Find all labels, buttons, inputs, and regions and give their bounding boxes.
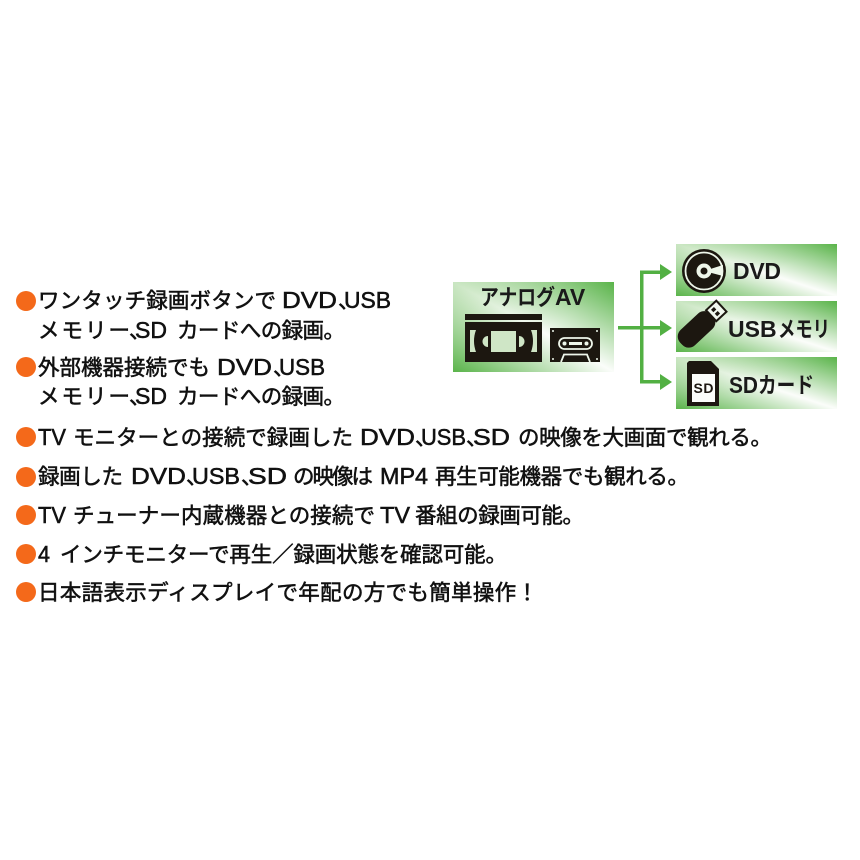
bullet: TV monitor playback xyxy=(16,424,772,450)
bullet: MP4 playback: 録画した xyxy=(38,465,123,489)
bullet: one-touch recording: メモリー xyxy=(38,319,130,343)
bullet: TV monitor playback: の映像を大画面で観れる。 xyxy=(518,426,772,450)
bullet: TV monitor playback: USB xyxy=(421,424,466,450)
bullet: TV tuner recording: 番組の録画可能。 xyxy=(415,504,584,528)
bullet: TV tuner recording: TV xyxy=(38,502,66,528)
bullet: external device recording: 、 xyxy=(273,356,295,380)
bullet: MP4 playback: DVD xyxy=(131,463,186,489)
icon: cassette tape xyxy=(550,328,600,362)
panel: SD card xyxy=(676,357,837,409)
bullet: TV monitor playback: TV xyxy=(38,424,66,450)
bullet: TV monitor playback: DVD xyxy=(360,424,415,450)
bullet: Japanese display: 日本語表示ディスプレイで年配の方でも簡単操作！ xyxy=(38,581,538,605)
bullet: 4-inch monitor: 4 xyxy=(38,541,50,567)
bullet: one-touch recording: DVD xyxy=(282,287,337,313)
bullet: MP4 playback: 、 xyxy=(241,465,263,489)
bullet: TV monitor playback: SD xyxy=(473,424,510,450)
bullet: external device recording: SD xyxy=(135,383,167,409)
bullet: one-touch recording: SD xyxy=(135,317,167,343)
label: SD card: SD xyxy=(729,372,758,398)
bullet: one-touch recording xyxy=(16,287,391,343)
bullet: TV monitor playback: 、 xyxy=(415,426,437,450)
bullet: MP4 playback: 、 xyxy=(186,465,208,489)
bullet: TV tuner recording: チューナー内蔵機器との接続で xyxy=(73,504,375,528)
bullet: external device recording: メモリー xyxy=(38,385,130,409)
icon: SD card: SD xyxy=(694,380,714,396)
bullet: MP4 playback: の映像は xyxy=(293,465,373,489)
bullet: external device recording: USB xyxy=(279,354,325,380)
bullet: TV tuner recording xyxy=(16,502,584,528)
icon: VHS tape xyxy=(465,314,542,362)
bullet: 4-inch monitor: インチモニターで再生／録画状態を確認可能。 xyxy=(60,543,507,567)
panel: analog AV source xyxy=(453,282,614,372)
bullet: external device recording xyxy=(16,354,345,409)
bullet: one-touch recording: 、 xyxy=(338,289,360,313)
icon: USB stick xyxy=(674,298,729,351)
bullet: external device recording: カードへの録画。 xyxy=(177,385,345,409)
label: USB memory: USB xyxy=(728,316,777,342)
bullet: external device recording: 、 xyxy=(129,385,151,409)
bullet: MP4 playback xyxy=(16,463,689,489)
bullet: one-touch recording: 、 xyxy=(129,319,151,343)
bullet: MP4 playback: MP4 xyxy=(380,463,428,489)
bullet: one-touch recording: USB xyxy=(344,287,391,313)
panel: DVD xyxy=(676,244,837,296)
heading: analog AV: AV xyxy=(555,284,586,310)
bullet: one-touch recording: カードへの録画。 xyxy=(177,319,345,343)
icon: disc xyxy=(682,249,726,293)
bullet: MP4 playback: USB xyxy=(192,463,240,489)
panel: USB memory xyxy=(674,298,837,352)
bullet: TV tuner recording: TV xyxy=(380,502,410,528)
bullet: external device recording: DVD xyxy=(217,354,272,380)
label: DVD: DVD xyxy=(733,258,781,284)
bullet: TV monitor playback: 、 xyxy=(466,426,488,450)
bullet: MP4 playback: 再生可能機器でも観れる。 xyxy=(435,465,689,489)
heading: analog AV: アナログ xyxy=(480,285,555,310)
bullet: external device recording: 外部機器接続でも xyxy=(38,356,210,380)
bullet: MP4 playback: SD xyxy=(248,463,287,489)
bullet: one-touch recording: ワンタッチ録画ボタンで xyxy=(38,289,276,313)
arrow: branching to outputs xyxy=(618,264,672,390)
label: USB memory: メモリ xyxy=(778,317,830,342)
bullet: TV monitor playback: モニターとの接続で録画した xyxy=(73,426,353,450)
icon: SD card xyxy=(687,361,719,406)
label: SD card: カード xyxy=(758,373,814,398)
